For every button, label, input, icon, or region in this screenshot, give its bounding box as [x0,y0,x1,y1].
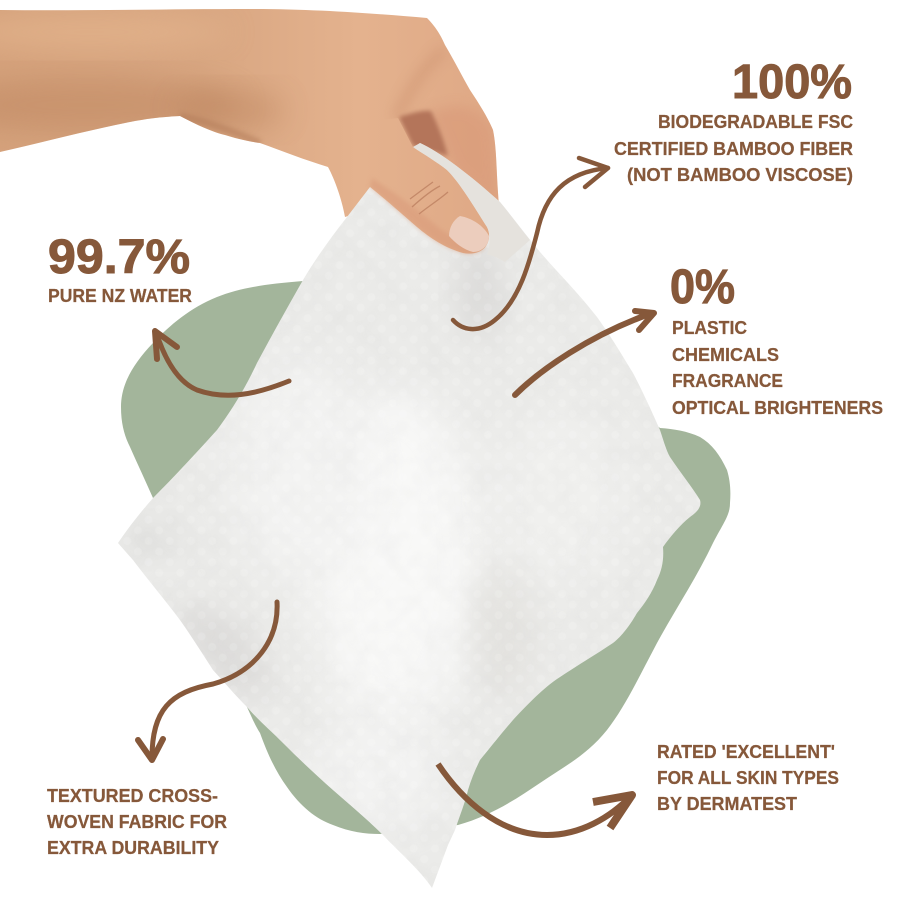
stat: 0% list: PLASTIC [672,317,747,338]
arrow: to 0% [515,311,654,395]
stat: 0% list: 0% [670,261,735,314]
arrow: to dermatest text [438,764,632,835]
arrow: to 99.7% [155,331,289,395]
stat: 99.7% water: 99.7% [48,231,190,284]
wipe texture [100,130,720,900]
stat: 100% biodegradable: 100% [732,56,852,109]
callout: textured fabric: WOVEN FABRIC FOR [47,811,227,832]
stat: 99.7% water: PURE NZ WATER [48,285,192,306]
stat: 0% list: CHEMICALS [672,344,779,365]
callout: textured fabric [47,785,227,858]
callout: dermatest rating: BY DERMATEST [657,793,797,814]
thumb knuckle creases [410,182,448,214]
hand: arm and fingers behind wipe [0,9,499,217]
callout: dermatest rating: FOR ALL SKIN TYPES [657,767,839,788]
thumb nail [449,216,489,252]
stat: 100% biodegradable [614,56,853,185]
stat: 0% list: OPTICAL BRIGHTENERS [672,397,883,418]
stat: 100% biodegradable: BIODEGRADABLE FSC [658,111,853,132]
stat: 100% biodegradable: CERTIFIED BAMBOO FIBER [614,138,853,159]
callout: dermatest rating: RATED 'EXCELLENT' [657,741,835,762]
wipe shading [186,252,514,834]
finger shadow crease [399,111,448,156]
callout: textured fabric: EXTRA DURABILITY [47,837,219,858]
callout: textured fabric: TEXTURED CROSS- [47,785,218,806]
stat: 100% biodegradable: (NOT BAMBOO VISCOSE) [627,164,853,185]
stat: 0% list [670,261,883,418]
green blob [121,281,730,834]
hand shading [0,21,498,190]
wet wipe [100,130,720,900]
arrow: to 100% [453,158,608,329]
hand: thumb over wipe [328,118,489,254]
stat: 99.7% water [48,231,192,306]
wipe flap over thumb [413,143,530,262]
arrow: to fabric text [138,602,277,760]
stat: 0% list: FRAGRANCE [672,370,783,391]
thumb shading [370,178,486,254]
callout: dermatest rating [657,741,839,814]
